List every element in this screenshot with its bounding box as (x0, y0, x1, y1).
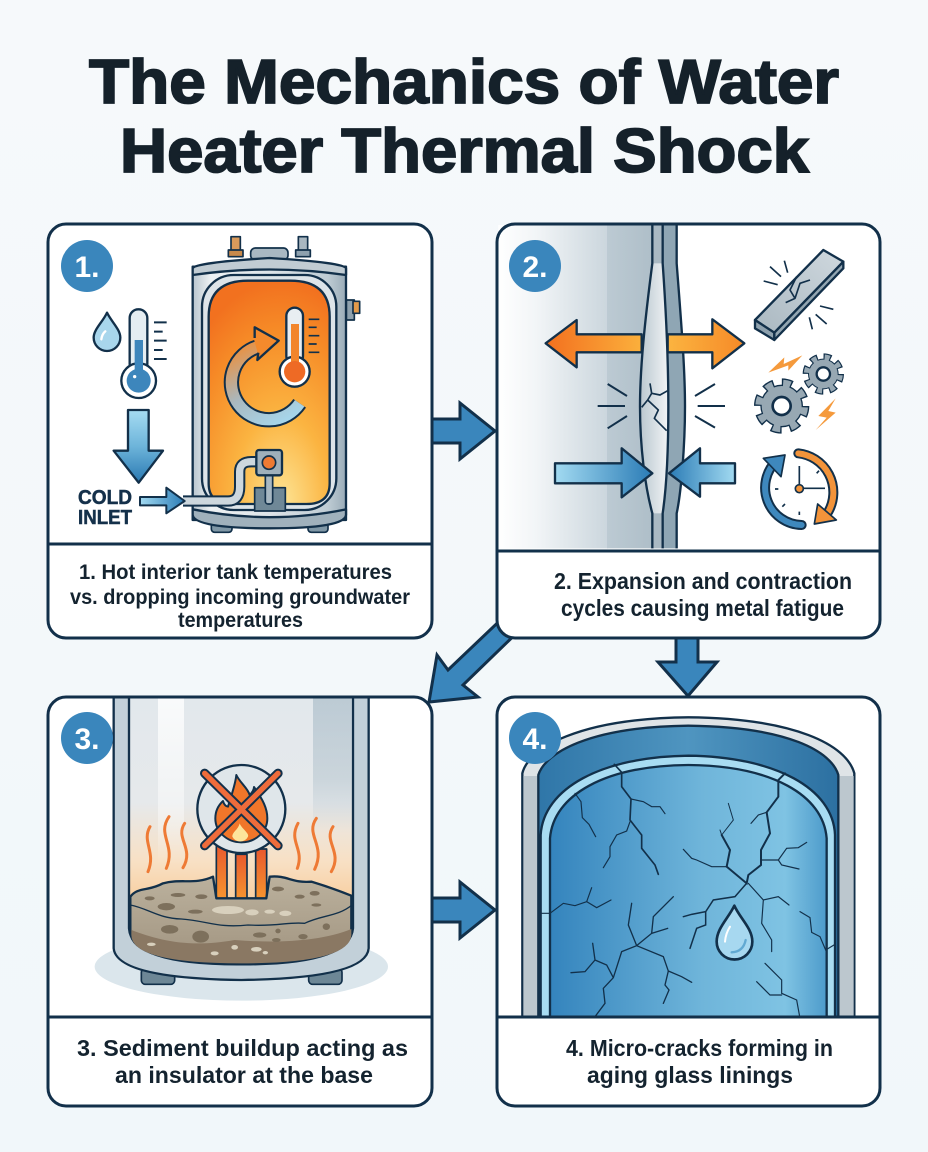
badge 4 (509, 712, 561, 764)
title: The Mechanics of Water (89, 48, 839, 117)
icon: heat waves (147, 817, 335, 872)
illustration: cracked glass lining (522, 717, 854, 1019)
caption 1: 1. Hot interior tank temperatures (79, 561, 392, 584)
arrow: cold water down (114, 410, 163, 483)
badge 3 (61, 712, 113, 764)
badge 1 (61, 240, 113, 292)
illustration: water heater and cold inlet (94, 237, 360, 532)
arrow: contraction (555, 448, 735, 497)
caption 3: 3. Sediment buildup acting as (77, 1035, 408, 1061)
icon: gears (759, 355, 840, 430)
crack network (540, 764, 835, 1018)
badge 3: 3. (74, 723, 100, 756)
panel 1: hot tank vs cold groundwater (48, 224, 432, 638)
arrow: expansion (546, 319, 744, 368)
icon: cracked bar (755, 250, 843, 340)
arrow: step 2 to 4 (658, 630, 717, 696)
caption 3: an insulator at the base (115, 1062, 373, 1088)
panel 2: expansion and contraction (497, 223, 880, 638)
caption 2: 2. Expansion and contraction (554, 568, 852, 594)
caption 1: vs. dropping incoming groundwater (70, 586, 410, 609)
caption 2 (554, 568, 852, 621)
arrow: step 3 to 4 (425, 882, 495, 938)
caption 2: cycles causing metal fatigue (561, 595, 844, 621)
title (89, 48, 839, 186)
label: cold inlet (78, 487, 132, 529)
icon: water drop (94, 313, 120, 351)
arrow: cold inlet (140, 488, 185, 513)
icon: cold thermometer (121, 309, 167, 398)
badge 1: 1. (74, 251, 100, 284)
icon: cycle clock (763, 453, 836, 525)
icon: hot thermometer (280, 308, 319, 387)
caption 1: temperatures (178, 609, 303, 632)
title: Heater Thermal Shock (120, 117, 810, 186)
badge 2: 2. (522, 251, 548, 284)
icon: water droplet (717, 906, 752, 959)
icon: crossed out flame (197, 765, 285, 902)
arrow: step 2 to 3 (429, 610, 526, 702)
caption 4: 4. Micro-cracks forming in (566, 1035, 833, 1061)
arrow: step 1 to 2 (425, 403, 495, 459)
caption 1 (70, 561, 410, 632)
label: cold inlet: INLET (78, 507, 132, 529)
caption 4: aging glass linings (587, 1062, 793, 1088)
crack burst (598, 383, 725, 431)
panel 4: micro-cracks in glass lining (497, 697, 880, 1106)
illustration: flexing metal wall (498, 223, 843, 552)
sediment layers (130, 876, 352, 963)
caption 4 (566, 1035, 833, 1088)
badge 2 (509, 240, 561, 292)
illustration: tank base with sediment (95, 695, 388, 1001)
panel 3: sediment buildup (48, 695, 432, 1106)
badge 4: 4. (522, 723, 548, 756)
icon: circulation arrow (231, 327, 300, 420)
label: cold inlet: COLD (78, 487, 132, 509)
caption 3 (77, 1035, 408, 1088)
